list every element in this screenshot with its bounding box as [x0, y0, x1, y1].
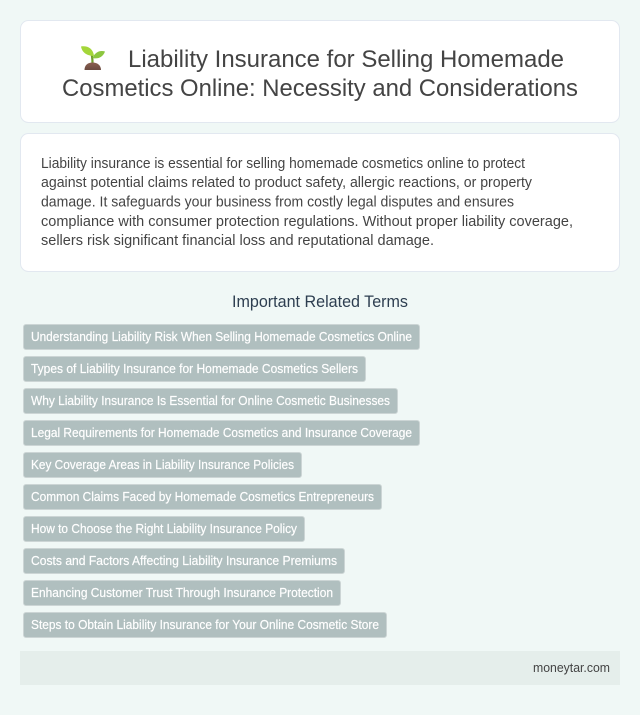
tag 5 [24, 452, 302, 478]
tag 4 [24, 420, 420, 446]
intro paragraph: sellers risk significant financial loss and reputational damage. [41, 233, 434, 249]
icon: seedling [81, 46, 105, 70]
intro paragraph: damage. It safeguards your business from costly legal disputes and ensures [41, 194, 514, 210]
tag 8: Costs and Factors Affecting Liability Insurance Premiums [31, 553, 337, 568]
tag 5: Key Coverage Areas in Liability Insurance Policies [31, 457, 294, 472]
intro paragraph: against potential claims related to product safety, allergic reactions, or property [41, 175, 533, 191]
intro paragraph: compliance with consumer protection regulations. Without proper liability coverage, [41, 214, 573, 230]
title [62, 46, 578, 102]
footer: moneytar.com [533, 661, 610, 675]
tag 1: Understanding Liability Risk When Selling Homemade Cosmetics Online [31, 329, 412, 344]
tag 2: Types of Liability Insurance for Homemade Cosmetics Sellers [31, 361, 358, 376]
intro paragraph [41, 156, 573, 249]
tag 9: Enhancing Customer Trust Through Insurance Protection [31, 585, 333, 600]
tag 7 [24, 516, 304, 542]
panel: title card [20, 20, 620, 122]
heading: important related terms: Important Related Terms [232, 293, 408, 311]
tag 2 [24, 356, 366, 382]
tag 1 [24, 324, 420, 350]
tag 10 [24, 612, 386, 638]
tag 6 [24, 484, 382, 510]
footer [20, 651, 620, 685]
term tags list [24, 324, 420, 638]
title: Cosmetics Online: Necessity and Considerations [62, 75, 578, 102]
tag 4: Legal Requirements for Homemade Cosmetics and Insurance Coverage [31, 425, 412, 440]
tag 3: Why Liability Insurance Is Essential for Online Cosmetic Businesses [31, 393, 390, 408]
title: Liability Insurance for Selling Homemade [128, 46, 564, 73]
tag 9 [24, 580, 340, 606]
intro paragraph: Liability insurance is essential for selling homemade cosmetics online to protect [41, 156, 525, 172]
tag 3 [24, 388, 398, 414]
panel: intro card [20, 134, 620, 272]
tag 10: Steps to Obtain Liability Insurance for Your Online Cosmetic Store [31, 617, 379, 632]
tag 8 [24, 548, 344, 574]
tag 6: Common Claims Faced by Homemade Cosmetics Entrepreneurs [31, 489, 374, 504]
tag 7: How to Choose the Right Liability Insurance Policy [31, 521, 298, 536]
